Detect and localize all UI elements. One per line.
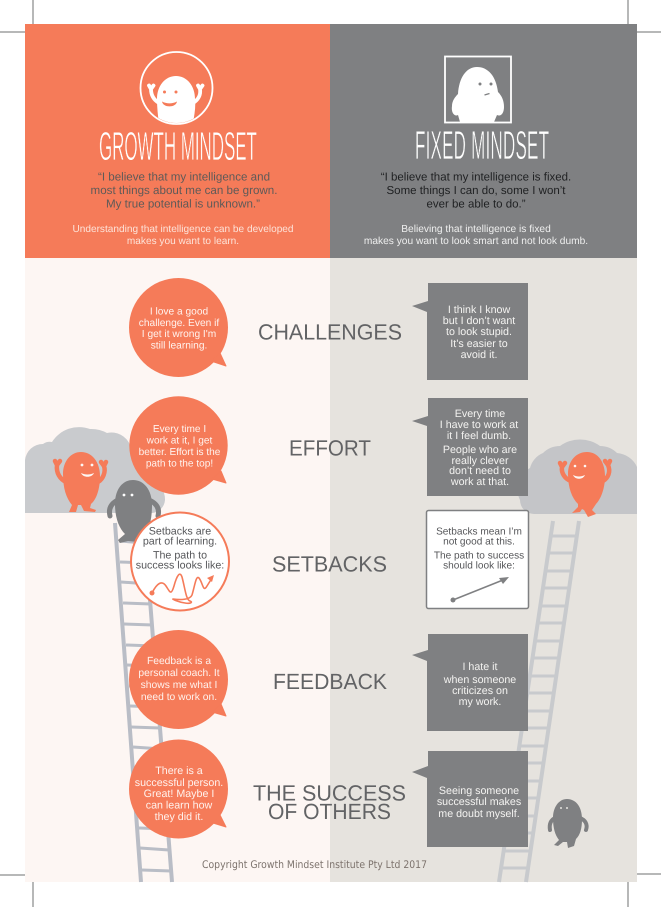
speech bubble: growth success of others: they did it.: [155, 811, 203, 823]
row: the success of others: [129, 740, 528, 847]
speech bubble: growth feedback: personal coach. It: [138, 668, 220, 679]
quote: growth: most things about me can be grown.: [91, 184, 277, 197]
speech box: fixed effort: I have to work at: [440, 419, 518, 431]
row: effort: [129, 396, 528, 496]
panel: growth column background: [25, 258, 330, 882]
speech bubble: growth success of others: successful person.: [135, 777, 223, 789]
speech bubble: growth challenges: still learning.: [151, 340, 207, 352]
illustration: right cloud: [517, 439, 637, 514]
speech box: fixed setbacks: Setbacks mean I’m: [436, 526, 522, 538]
speech box: fixed feedback: I hate it: [462, 661, 498, 673]
quote: fixed: Some things I can do, some I won’t: [387, 185, 566, 197]
text: fixed summary: [364, 224, 588, 247]
speech box: fixed setbacks: [426, 510, 528, 608]
speech box: fixed challenges: but I don’t want: [443, 315, 515, 327]
speech box: fixed setbacks: The path to success: [434, 550, 524, 562]
label: the success of others: THE SUCCESS: [253, 780, 406, 806]
speech box: fixed feedback: criticizes on: [452, 685, 508, 697]
speech bubble: growth setbacks: [131, 512, 229, 610]
label: the success of others: [253, 780, 406, 824]
illustration: left cloud: [25, 427, 165, 513]
speech bubble: growth effort: work at it, I get: [146, 436, 213, 446]
speech bubble: growth feedback: shows me what I: [141, 680, 217, 691]
speech bubble: growth setbacks: Setbacks are: [149, 526, 211, 538]
quote: growth: [91, 170, 277, 210]
speech box: fixed setbacks: not good at this.: [443, 536, 515, 548]
speech box: fixed success of others: me doubt myself.: [438, 808, 520, 820]
speech bubble: growth feedback: need to work on.: [141, 692, 217, 703]
speech box: fixed success of others: [412, 751, 528, 847]
speech box: fixed effort: really clever: [451, 455, 509, 467]
illustration: left ladder: [115, 523, 172, 882]
label: effort: EFFORT: [289, 436, 371, 460]
speech bubble: growth challenges: I love a good: [150, 306, 209, 318]
illustration: right ladder: [499, 521, 579, 882]
character: orange left on cloud: [55, 452, 106, 512]
speech bubble: growth challenges: [129, 278, 228, 377]
panel: fixed column background: [330, 258, 637, 882]
speech bubble: growth success of others: Great! Maybe I: [144, 788, 214, 800]
icon: happy character in circle: [140, 52, 212, 124]
text: fixed summary: Believing that intelligence is fixed: [401, 224, 551, 235]
speech box: fixed feedback: [412, 634, 528, 731]
quote: fixed: “I believe that my intelligence is fixed.: [381, 172, 571, 184]
speech bubble: growth challenges: challenge. Even if: [139, 318, 219, 329]
icon: unsure character in square: [445, 56, 511, 122]
text: fixed summary: makes you want to look smart and not look dumb.: [364, 236, 588, 247]
speech bubble: growth effort: path to the top!: [146, 458, 213, 470]
speech box: fixed success of others: successful makes: [437, 796, 521, 808]
speech box: fixed effort: work at that.: [450, 476, 509, 488]
speech box: fixed challenges: [412, 283, 528, 380]
icon: straight arrow: [450, 577, 509, 602]
label: setbacks: SETBACKS: [272, 552, 387, 576]
speech box: fixed success of others: Seeing someone: [439, 785, 519, 797]
speech bubble: growth setbacks: part of learning.: [143, 536, 217, 548]
label: the success of others: OF OTHERS: [268, 799, 391, 824]
row: feedback: [129, 630, 528, 731]
speech bubble: growth effort: Every time I: [153, 424, 206, 435]
text: growth summary: makes you want to learn.: [127, 236, 239, 247]
speech box: fixed effort: Every time: [455, 408, 505, 420]
speech bubble: growth challenges: I get it wrong I'm: [142, 329, 216, 340]
text: growth summary: [72, 224, 294, 247]
character: grey climbing ladder: [109, 480, 159, 543]
panel: growth mindset header: [25, 24, 330, 258]
speech bubble: growth effort: [129, 396, 228, 495]
speech bubble: growth success of others: There is a: [155, 765, 203, 777]
speech box: fixed challenges: It’s easier to: [450, 338, 508, 350]
copyright: Copyright Growth Mindset Institute Pty Ltd 2017: [202, 859, 427, 871]
quote: fixed: ever be able to do.”: [426, 198, 526, 210]
speech box: fixed feedback: when someone: [443, 674, 516, 686]
row: setbacks: [131, 510, 528, 610]
speech box: fixed challenges: to look stupid.: [446, 326, 512, 338]
speech box: fixed effort: it I feel dumb.: [447, 430, 511, 442]
speech box: fixed effort: don’t need to: [449, 465, 511, 477]
quote: growth: My true potential is unknown.”: [106, 198, 260, 210]
heading: growth mindset: GROWTH MINDSET: [99, 123, 257, 169]
speech bubble: growth feedback: [129, 630, 228, 729]
speech bubble: growth effort: better. Effort is the: [139, 447, 221, 458]
speech box: fixed feedback: my work.: [459, 696, 501, 708]
text: growth summary: Understanding that intelligence can be developed: [72, 224, 294, 235]
icon: squiggly path: [150, 574, 214, 603]
label: feedback: FEEDBACK: [273, 669, 387, 694]
label: challenges: CHALLENGES: [258, 320, 402, 344]
speech box: fixed effort: [412, 398, 528, 496]
speech bubble: growth setbacks: The path to: [153, 550, 207, 562]
heading: fixed mindset: FIXED MINDSET: [415, 122, 549, 168]
speech bubble: growth success of others: [129, 740, 228, 838]
quote: fixed: [381, 172, 571, 210]
panel: fixed mindset header: [330, 24, 637, 258]
quote: growth: “I believe that my intelligence and: [98, 170, 270, 184]
speech box: fixed challenges: I think I know: [448, 304, 510, 316]
speech box: fixed setbacks: should look like:: [443, 560, 515, 572]
speech bubble: growth success of others: can learn how: [146, 800, 213, 812]
character: grey bottom right: [550, 799, 587, 848]
character: orange right on cloud: [560, 452, 610, 517]
row: challenges: [129, 278, 528, 380]
speech bubble: growth feedback: Feedback is a: [147, 656, 211, 667]
speech box: fixed challenges: avoid it.: [461, 349, 497, 361]
speech box: fixed effort: People who are: [443, 444, 517, 456]
speech bubble: growth setbacks: success looks like:: [136, 560, 224, 572]
